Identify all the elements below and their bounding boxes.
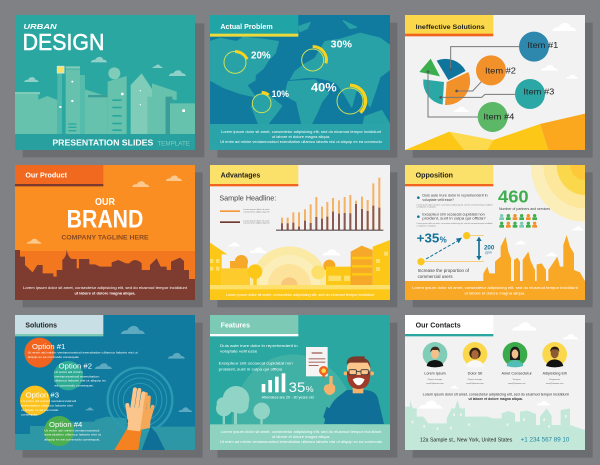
donut: 10%: 10% [272,89,290,99]
option 4: Ut enim ad minim veniamnostrud [44,428,100,432]
option 2: Ut enim ad minim [54,370,83,374]
donut: 30% [302,40,352,71]
item 1 [519,32,559,62]
option 2: veniamnostrud exercitation [54,375,100,379]
clouds [27,176,182,244]
person 3: Designer [513,378,521,381]
bottom band [15,134,195,150]
text blocks [219,343,298,371]
body text: Ut enim ad minim veniamnostrud exercitation ullamco laboris nisi ut aliquip ex ea commodo [220,140,382,144]
clouds [24,57,186,82]
stat 35%: 35 [289,379,306,395]
donut: 20%: 20% [251,51,271,62]
option 3: Ut enim ad minim veniamnostrud [21,399,76,403]
slide: actual problem: Actual Problem [220,24,273,31]
high five hands [114,389,165,450]
slide: solutions: Solutions [25,323,57,330]
sun [531,165,585,222]
option 1: aliquip ex ea commodo consequat. [28,355,80,359]
brand text: OUR [95,197,115,208]
option 2 [54,361,107,390]
item 3 [515,79,555,109]
header [405,315,493,334]
header [210,315,298,334]
people icons [499,214,537,228]
person 1: Lorem Ipsum [424,372,446,376]
sunrise arcs [250,246,329,286]
bullet points: Lorem ipsum dolor sit amet, consectetur adipisicing elit, sed do eiusmod tempor incididunt [417,203,493,206]
brand text: COMPANY TAGLINE HERE [61,235,149,241]
stat 460: Number of partners and services [499,207,550,211]
address and phone [420,436,570,443]
brand text [61,197,149,241]
+35% growth diagram: Increase the proportion of [418,268,470,273]
title [23,22,191,148]
connector lines [428,47,520,117]
item 2: Item #2 [485,65,516,75]
slide: our contacts [405,315,593,458]
slide: advantages: Advantages [221,173,260,180]
stat 460: 460 [498,187,529,207]
skyline [483,235,585,281]
option 2: ea commodo consequat. [54,384,94,388]
background dome [232,354,355,425]
option 4 [44,416,101,446]
legend: Lorem ipsum dolor sit amet [243,208,270,211]
slide: advantages [210,165,397,307]
item 4 [478,102,515,132]
person 4 [542,342,567,385]
world map [210,21,389,123]
text blocks: voluptate velit esse [220,348,258,353]
legend: consectetur adipisicing elit [243,210,270,213]
person 2 [463,342,487,385]
brand text: BRAND [67,206,143,234]
slide: ineffective solutions [405,15,593,158]
clouds [85,326,192,412]
text blocks: Excepteur sint occaecat cupidatat non [219,361,293,366]
text blocks: proident, sunt in culpa qui officia [219,366,283,371]
bottom band [210,124,390,150]
bullet points [417,194,493,227]
+35% growth diagram: % [440,236,447,245]
donut: 10% [252,89,290,113]
bullet points: ut labore et dolore [417,206,436,209]
person 3 [501,342,533,385]
body text [220,130,382,144]
option 2: ullamco laboris nisi ut aliquip ex [54,379,107,383]
stat 35%: Attendees are 20 - 30 years old [262,395,314,399]
slide: opposition: ut labore et dolore magna aliqua. [464,291,526,295]
slide: opposition [405,165,593,307]
slide: features: Features [221,323,250,330]
slide: ineffective solutions: Ineffective Solutions [416,24,485,31]
clouds [453,23,578,112]
header [405,15,493,34]
donut: 40% [311,81,366,114]
stat 35% [262,373,314,399]
skyline [15,249,195,300]
slide: features: Lorem ipsum dolor sit amet, consectetur adipisicing elit, sed do eiusmod tempor incididunt [221,430,381,434]
header [405,165,493,184]
ground shapes [405,114,585,150]
stat 460 [498,187,550,211]
address and phone: 12a Sample st., New York, United States [420,437,513,443]
person 4: Adipisicing Elit [543,372,567,376]
person 1: email@domain.com [426,383,444,385]
person 1 [423,342,447,385]
option 3 [20,386,76,416]
option 2: Option #2 [59,362,92,371]
footer band [210,424,390,450]
slide: opposition: Lorem ipsum dolor sit amet, consectetur adipisicing elit, sed do eiusmod tempor incididunt [412,286,578,290]
slide: features [210,315,397,458]
bullet points: Duis aute irure dolor in reprehenderit in [422,194,488,198]
option 1: Option #1 [32,342,65,351]
stat 35%: % [306,384,314,394]
donut: 30%: 30% [331,40,352,51]
target rings [108,368,172,432]
text blocks: Duis aute irure dolor in reprehenderit in [220,343,298,348]
header [210,15,298,34]
person 3: Amet Consectetur [501,372,533,376]
clouds [228,242,341,255]
+35% growth diagram: 200 [484,244,495,251]
option 4: exercitation ullamco laboris nisi ut [44,433,101,437]
slide: our contacts: Our Contacts [416,323,461,330]
body text: ut labore et dolore magna aliqua. [272,135,330,139]
bullet points: voluptate velit esse? [422,198,454,202]
person 1: Project manager [428,378,443,381]
person 2: email@domain.com [466,383,484,385]
person 2: Project manager [468,378,483,381]
+35% growth diagram: commercial users [418,274,453,279]
slide: opposition: Opposition [416,173,453,180]
item 4: Item #4 [483,111,515,121]
person 4: Programmer [549,378,561,381]
certificate [306,347,328,379]
donut: 20% [224,51,271,73]
footer band [210,289,390,300]
town illustration [210,240,390,290]
slide: features: ut labore et dolore magna aliqua. [272,435,330,439]
title: TEMPLATE [157,140,191,147]
body text: Lorem ipsum dolor sit amet, consectetur adipisicing elit, sed do eiusmod tempor incididunt [23,286,187,290]
city [15,417,195,450]
footer band [405,281,585,300]
trees [216,386,270,424]
legend: Lorem ipsum dolor sit amet [243,219,270,222]
slide: actual problem [210,15,397,158]
body text: Lorem ipsum dolor sit amet, consectetur adipisicing elit, sed do eiusmod tempor incididunt [221,130,381,134]
pie chart [419,59,470,105]
body text: Lorem ipsum dolor sit amet, consectetur adipisicing elit, sed do eiusmod tempor incididunt [423,392,569,396]
item 2 [476,55,516,85]
bar chart [276,178,383,231]
icon: lit window [57,66,64,73]
legend: Sample Headline: [219,195,276,202]
slide: our product [15,165,203,307]
slide: urban design cover [15,15,204,157]
title: PRESENTATION SLIDES [52,138,154,148]
address and phone: +1 234 567 89 10 [521,436,570,443]
option 4: Option #4 [49,420,83,429]
option 4: aliquip ex ea commodo consequat. [44,437,101,441]
skyline [405,400,585,450]
header [15,165,103,184]
body text [23,286,187,295]
option 1: Ut enim ad minim veniamnostrud exercitation ullamco laboris nisi ut [28,351,138,355]
item 3: Item #3 [523,87,555,97]
header [210,165,298,184]
legend [219,195,276,225]
+35% growth diagram: +35 [417,231,439,246]
man character [323,356,384,424]
option 3: ut aliquip ex ea commodo [21,408,59,412]
person 2: Dolor Sit [468,372,482,376]
clouds [515,226,584,256]
slide: features: Ut enim ad minim veniamnostrud exercitation ullamco laboris nisi ut aliquip ex ea commodo [220,440,382,444]
bullet points: ut labore et dolore [417,224,436,227]
donut: 40%: 40% [311,81,337,95]
option 3: exercitation ullamco laboris nisi [21,403,73,407]
body text: ut labore et dolore magna aliqua. [74,291,136,295]
person 3: email@domain.com [508,383,526,385]
title: URBAN [23,22,57,31]
option 3: consequat. [21,412,38,416]
slide: advantages: Lorem ipsum dolor sit amet, consectetur adipisicing elit, sed do eiusmod tempor incididunt [226,293,374,297]
+35% growth diagram [417,231,495,279]
slide: our product: Our Product [25,173,68,180]
city illustration [15,66,195,134]
option 1 [24,338,138,368]
body text [423,392,569,401]
option 3: Option #3 [26,391,59,400]
body text: ut labore et dolore magna aliqua. [468,397,523,401]
title: DESIGN [23,29,104,55]
item 1: Item #1 [527,40,559,50]
legend: consectetur adipisicing elit [243,222,270,225]
clouds [418,322,578,409]
bullet points: proident, sunt in culpa qui officia? [422,217,486,221]
slide: solutions [15,315,203,458]
bullet points: Lorem ipsum dolor sit amet, consectetur adipisicing elit, sed do eiusmod tempor incididunt [417,222,493,225]
+35% growth diagram: ppm [485,251,492,255]
header [15,315,103,334]
person 4: email@domain.com [546,383,564,385]
bullet points: Excepteur sint occaecat cupidatat non [422,212,485,216]
